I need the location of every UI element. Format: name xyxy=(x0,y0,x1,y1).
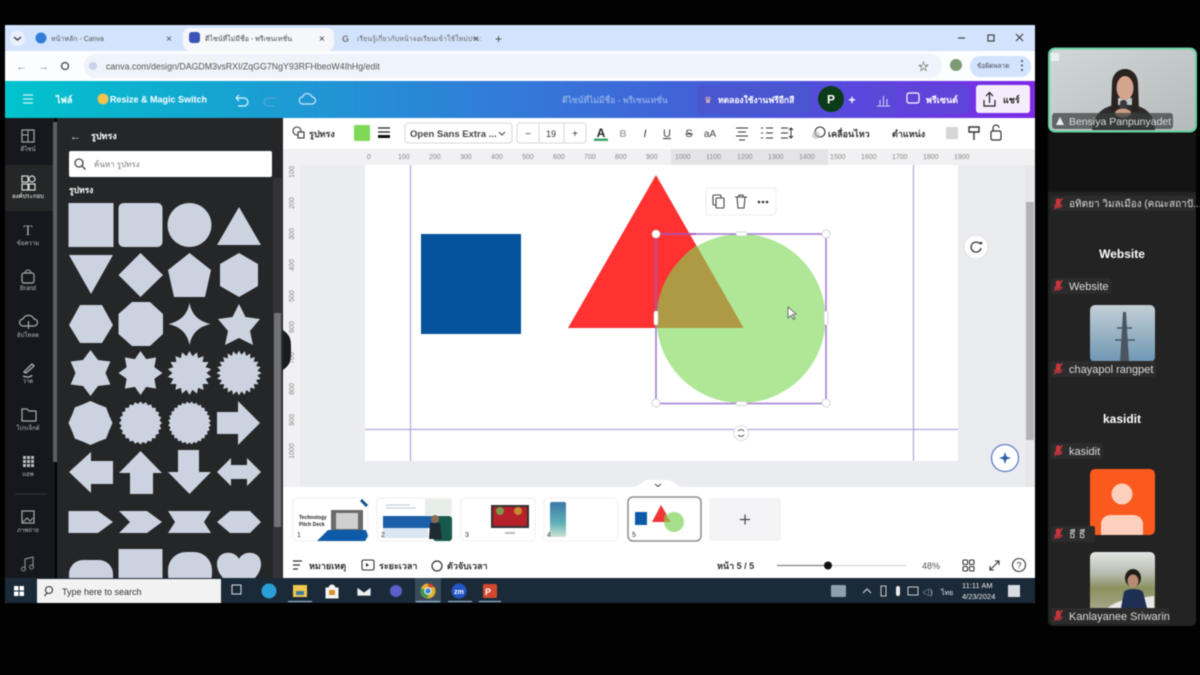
tab: home: หน้าหลัก - Canva xyxy=(51,35,104,43)
rulers: 300 xyxy=(289,228,296,240)
browser address bar: canva.com/design/DAGDM3vsRXI/ZqGG7NgY93RFHbeoW4IhHg/edit xyxy=(106,62,380,72)
rail item: elements xyxy=(12,176,44,200)
share button: แชร์ xyxy=(1003,94,1020,105)
analytics button xyxy=(870,85,896,114)
editor workspace xyxy=(283,118,1035,488)
participant name tag: kasidit: kasidit xyxy=(1069,446,1100,458)
tab: google: + xyxy=(495,32,502,46)
participant name tag: Atitaya xyxy=(1051,196,1200,211)
text format buttons: I xyxy=(643,128,647,140)
rulers: 1000 xyxy=(289,443,296,459)
rulers: 900 xyxy=(646,154,658,161)
thumbnail 4: 4 xyxy=(547,532,551,539)
add page button xyxy=(709,498,781,541)
present button: พรีเซนต์ xyxy=(926,94,958,105)
font size stepper xyxy=(517,123,586,143)
panel collapse handle xyxy=(283,330,291,370)
trial button xyxy=(697,85,810,114)
thumbnail 1: Pitch Deck xyxy=(299,522,325,528)
tab: home xyxy=(36,32,172,45)
system tray: 11:11 AM xyxy=(962,581,993,590)
rail item: text: T xyxy=(23,223,33,239)
rail item: text xyxy=(17,223,39,247)
participant: kasidit heading: kasidit xyxy=(1103,412,1141,426)
thumbnail 5 selected: 5 xyxy=(632,532,636,539)
object toolbar xyxy=(283,118,1035,149)
zoom percentage: 48% xyxy=(922,561,940,571)
rail item: text: ข้อความ xyxy=(17,240,39,247)
rulers: 500 xyxy=(289,290,296,302)
position button: ตำแหน่ง xyxy=(892,129,925,139)
tab: google: เรียนรู้เกี่ยวกับหน้าจอเรียนเข้าใช้ใหม่ประ: xyxy=(357,34,482,43)
trial button: ทดลองใช้งานฟรีอีกสี xyxy=(718,95,795,105)
overlap of triangle and circle xyxy=(658,246,744,328)
magic assistant button xyxy=(992,444,1018,472)
blue square xyxy=(421,234,521,334)
tab: active design xyxy=(183,28,334,51)
rulers: 800 xyxy=(289,383,296,395)
text format buttons: A xyxy=(597,126,606,140)
browser address bar: ข้อผิดพลาด xyxy=(977,62,1010,70)
participant name tag: Kanlayanee: Kanlayanee Sriwarin xyxy=(1069,611,1170,623)
tab: google: G xyxy=(342,34,349,44)
page thumbnails strip xyxy=(283,487,1035,550)
search box xyxy=(69,151,272,177)
thumbnail 3 xyxy=(461,498,535,541)
speaker name tag xyxy=(1052,113,1173,129)
cursor xyxy=(788,307,796,320)
rail item: elements: องค์ประกอบ xyxy=(12,192,44,200)
start button xyxy=(14,586,24,596)
rulers: 400 xyxy=(491,154,503,161)
text format buttons xyxy=(594,126,793,141)
shape grid xyxy=(68,203,269,594)
animate button xyxy=(812,127,870,139)
browser address bar xyxy=(5,51,1035,81)
rail item: uploads xyxy=(17,315,39,339)
refresh page button xyxy=(964,235,988,259)
rulers: 900 xyxy=(289,414,296,426)
rulers: 800 xyxy=(615,154,627,161)
tab: active design: ดีไซน์ที่ไม่มีชื่อ - พรีเซนเทชั่น xyxy=(205,34,292,43)
font size stepper: + xyxy=(572,129,578,140)
rail item: brand: Brand xyxy=(20,286,36,292)
present button xyxy=(901,85,969,114)
rulers: 600 xyxy=(553,154,565,161)
thumbnail 2: 2 xyxy=(381,532,385,539)
participant name tag: chayapol xyxy=(1051,361,1156,377)
editor footer bar xyxy=(283,550,1035,578)
shapes side panel xyxy=(57,118,283,594)
font select xyxy=(405,123,512,143)
rulers: 1300 xyxy=(768,154,784,161)
avatar: + xyxy=(848,93,856,107)
canvas page xyxy=(365,165,958,461)
speaker video tile xyxy=(1049,48,1196,132)
rotate handle xyxy=(734,426,748,440)
tab: active design: × xyxy=(319,34,325,45)
system tray: ไทย xyxy=(940,588,953,597)
rulers: 200 xyxy=(429,154,441,161)
guides xyxy=(365,165,958,461)
font size stepper: 19 xyxy=(546,129,556,139)
participant name tag: Kanlayanee xyxy=(1051,608,1170,624)
canva header: Resize & Magic Switch xyxy=(110,94,207,104)
panel back heading: ← xyxy=(70,131,81,143)
participant name tag: Website xyxy=(1051,278,1111,294)
browser address bar: ← xyxy=(16,61,27,73)
duration: ระยะเวลา xyxy=(379,561,417,571)
search field xyxy=(37,579,221,603)
floating context toolbar xyxy=(706,188,776,215)
rulers: 1800 xyxy=(923,154,939,161)
rulers: 100 xyxy=(398,154,410,161)
shape type button: รูปทรง xyxy=(309,129,335,140)
thumbnail 4 xyxy=(544,498,618,541)
thumbnail 1 xyxy=(293,498,368,541)
rail item: photos: ภาพถ่าย xyxy=(17,527,39,534)
rulers: 700 xyxy=(584,154,596,161)
browser tab strip xyxy=(5,25,1035,51)
search box: ค้นหา รูปทรง xyxy=(94,160,140,170)
canva header: ดีไซน์ที่ไม่มีชื่อ - พรีเซนเทชั่น xyxy=(562,94,668,105)
thumbnail 3: 3 xyxy=(465,532,469,539)
rail item: projects: โปรเจ็กต์ xyxy=(16,423,40,432)
browser address bar: → xyxy=(38,61,49,73)
view icons xyxy=(963,558,1026,572)
rail item: photos xyxy=(17,511,39,534)
rulers: 1100 xyxy=(706,154,721,161)
rail item: audio xyxy=(22,557,34,571)
participant name tag: initials xyxy=(1051,526,1095,542)
green circle xyxy=(656,234,826,403)
duration xyxy=(362,560,417,571)
rail item: apps: แอพ xyxy=(22,471,34,478)
trial button: ♛ xyxy=(704,95,712,105)
rulers: 600 xyxy=(289,321,296,333)
left icon rail xyxy=(5,118,57,578)
rulers: 700 xyxy=(289,352,296,364)
rulers: 400 xyxy=(289,259,296,271)
participant name tag: initials: ธี ธี xyxy=(1069,528,1085,541)
tab: google xyxy=(342,32,502,46)
rulers: 200 xyxy=(289,197,296,209)
browser address bar: ☆ xyxy=(918,60,929,73)
rulers: 1000 xyxy=(675,154,691,161)
speaker figure xyxy=(1092,69,1155,130)
rail item: draw xyxy=(23,364,34,385)
search field: Type here to search xyxy=(62,587,142,597)
rulers: 100 xyxy=(289,166,296,178)
font size stepper: − xyxy=(525,129,531,140)
thumbnail 5 selected xyxy=(628,497,701,541)
rulers: 1600 xyxy=(861,154,877,161)
timer: ตัวจับเวลา xyxy=(447,561,488,571)
windows taskbar xyxy=(5,578,1035,603)
rail item: design xyxy=(20,130,36,153)
filmstrip toggle xyxy=(628,480,688,488)
zoom slider xyxy=(777,562,906,570)
text format buttons: U xyxy=(663,128,671,140)
font select: Open Sans Extra ... xyxy=(410,129,497,140)
text format buttons: aA xyxy=(704,129,716,140)
scrollbar xyxy=(1025,165,1035,487)
avatar: P xyxy=(827,92,835,106)
canva header: ไฟล์ xyxy=(55,94,72,105)
rulers: 1900 xyxy=(954,154,970,161)
rulers: 1500 xyxy=(830,154,846,161)
participant name tag: kasidit xyxy=(1051,443,1103,459)
rulers: 300 xyxy=(460,154,472,161)
avatar: orange default user xyxy=(1090,469,1155,535)
speaker name tag: Bensiya Panpunyadet xyxy=(1069,116,1171,128)
avatar xyxy=(818,86,856,112)
participant name tag: Website: Website xyxy=(1069,281,1109,293)
participant name tag: chayapol: chayapol rangpet xyxy=(1069,364,1153,376)
system tray xyxy=(831,581,1020,601)
share button xyxy=(976,85,1030,113)
rulers: 0 xyxy=(367,154,371,161)
canva header xyxy=(5,81,1035,118)
participant: Website heading: Website xyxy=(1099,247,1145,261)
rail item: uploads: อัปโหลด xyxy=(17,331,39,339)
rail item: design: ดีไซน์ xyxy=(20,145,36,153)
rulers: 1200 xyxy=(737,154,753,161)
panel back heading xyxy=(70,131,117,143)
thumbnail 2 xyxy=(377,498,452,541)
red triangle xyxy=(568,175,744,328)
pinned apps: P xyxy=(485,587,491,597)
rail item: apps xyxy=(22,456,34,478)
shape type button xyxy=(293,127,335,140)
rulers: 1700 xyxy=(892,154,908,161)
rulers: 1400 xyxy=(799,154,815,161)
pinned apps: zm xyxy=(454,589,464,596)
system tray: ◁) xyxy=(922,588,933,597)
rail item: projects xyxy=(16,409,40,432)
fill colour swatch xyxy=(354,125,370,141)
border style xyxy=(378,128,390,132)
page indicator: หน้า 5 / 5 xyxy=(717,561,754,571)
thumbnail 1: 1 xyxy=(297,532,301,539)
participant name tag: Atitaya: อทิตยา วิมลเมือง (คณะสถาปั... xyxy=(1069,198,1200,210)
rulers xyxy=(283,149,1035,487)
tool icons xyxy=(946,125,1001,140)
tab: google: × xyxy=(473,34,479,45)
panel scrollbar xyxy=(273,178,282,578)
pinned apps xyxy=(232,578,501,603)
selection box xyxy=(652,230,830,407)
window controls xyxy=(958,34,1023,41)
panel back heading: รูปทรง xyxy=(91,131,117,142)
notes xyxy=(293,561,346,572)
system tray: 4/23/2024 xyxy=(962,592,995,601)
rail item: brand xyxy=(20,270,36,292)
text format buttons: B xyxy=(619,129,627,140)
thumbnail 1: Technology xyxy=(299,515,327,521)
participant sidebar xyxy=(1048,48,1200,626)
avatar: landscape photo xyxy=(1090,552,1155,612)
notes: หมายเหตุ xyxy=(309,561,346,572)
rail item: draw: วาด xyxy=(23,379,33,385)
editor footer bar: ? xyxy=(1016,560,1022,570)
avatar: tower photo xyxy=(1090,305,1155,362)
animate button: เคลื่อนไหว xyxy=(828,127,870,139)
rulers: 500 xyxy=(522,154,534,161)
text format buttons: S xyxy=(685,128,693,140)
shapes heading: รูปทรง xyxy=(69,185,93,196)
tab: home: × xyxy=(166,34,172,45)
